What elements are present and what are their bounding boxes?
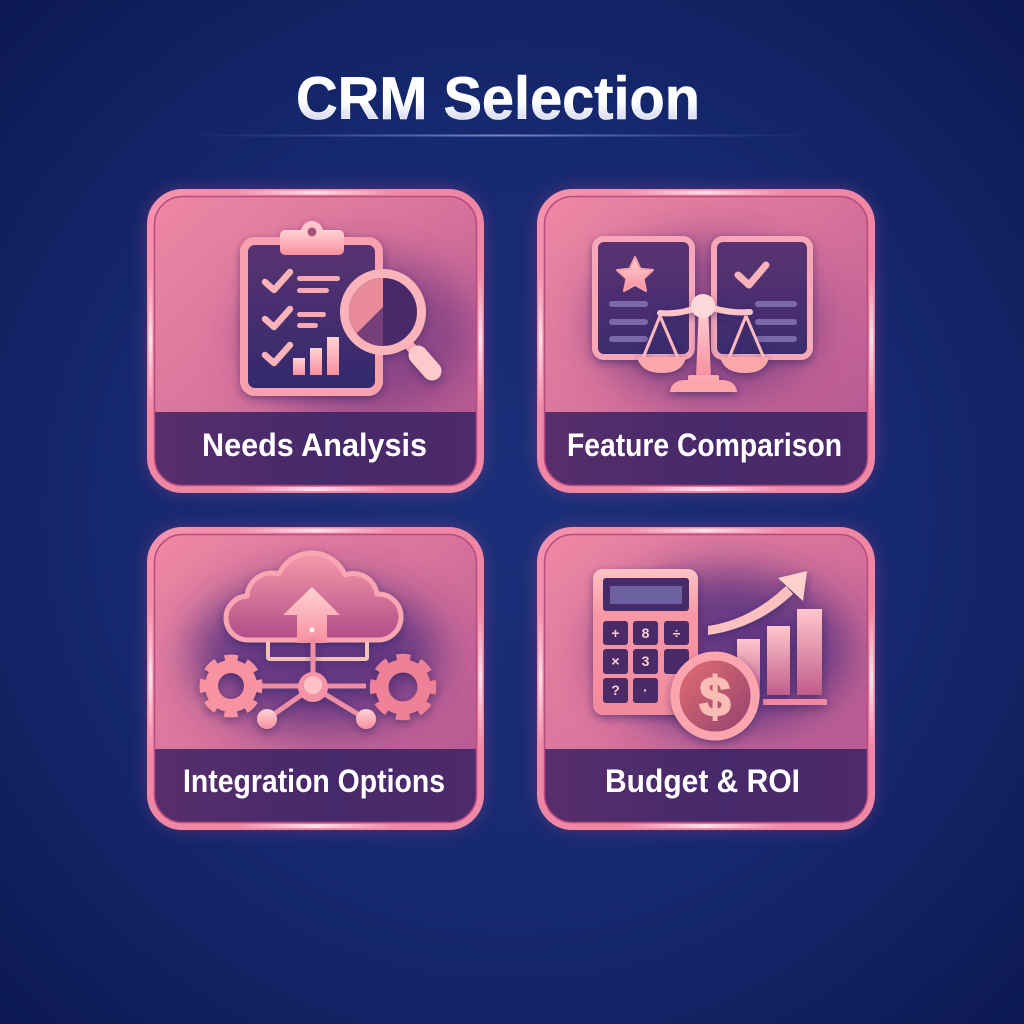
panel: feature comparison [538,190,874,491]
icon: cloud with upload arrow [226,553,401,659]
icon: calculator [593,569,698,715]
icon: calculator: 8 [642,625,650,641]
icon: calculator: ? [611,682,620,698]
icon: balance scale [637,294,769,392]
icon: calculator: + [611,625,620,641]
icon: calculator: ÷ [673,625,681,641]
label: feature comparison: Feature Comparison [567,427,842,463]
panel: budget and roi [538,528,874,828]
label: needs analysis: Needs Analysis [202,427,427,463]
icon: two feature cards [595,239,810,357]
label: integration options: Integration Options [183,763,445,799]
title: CRM Selection [296,65,700,132]
icon: calculator: × [611,653,620,669]
icon: growth bars and arrow [708,571,827,705]
panel: needs analysis [148,190,482,491]
panel: integration options [148,528,482,828]
label: budget and roi: Budget & ROI [605,763,800,799]
icon: connected gears and nodes [203,642,432,729]
icon: calculator: · [643,682,648,698]
icon: calculator: 3 [642,653,650,669]
icon: dollar coin: $ [699,665,731,728]
icon: clipboard with checklist and magnifier [244,221,432,392]
icon: dollar coin [675,656,755,736]
